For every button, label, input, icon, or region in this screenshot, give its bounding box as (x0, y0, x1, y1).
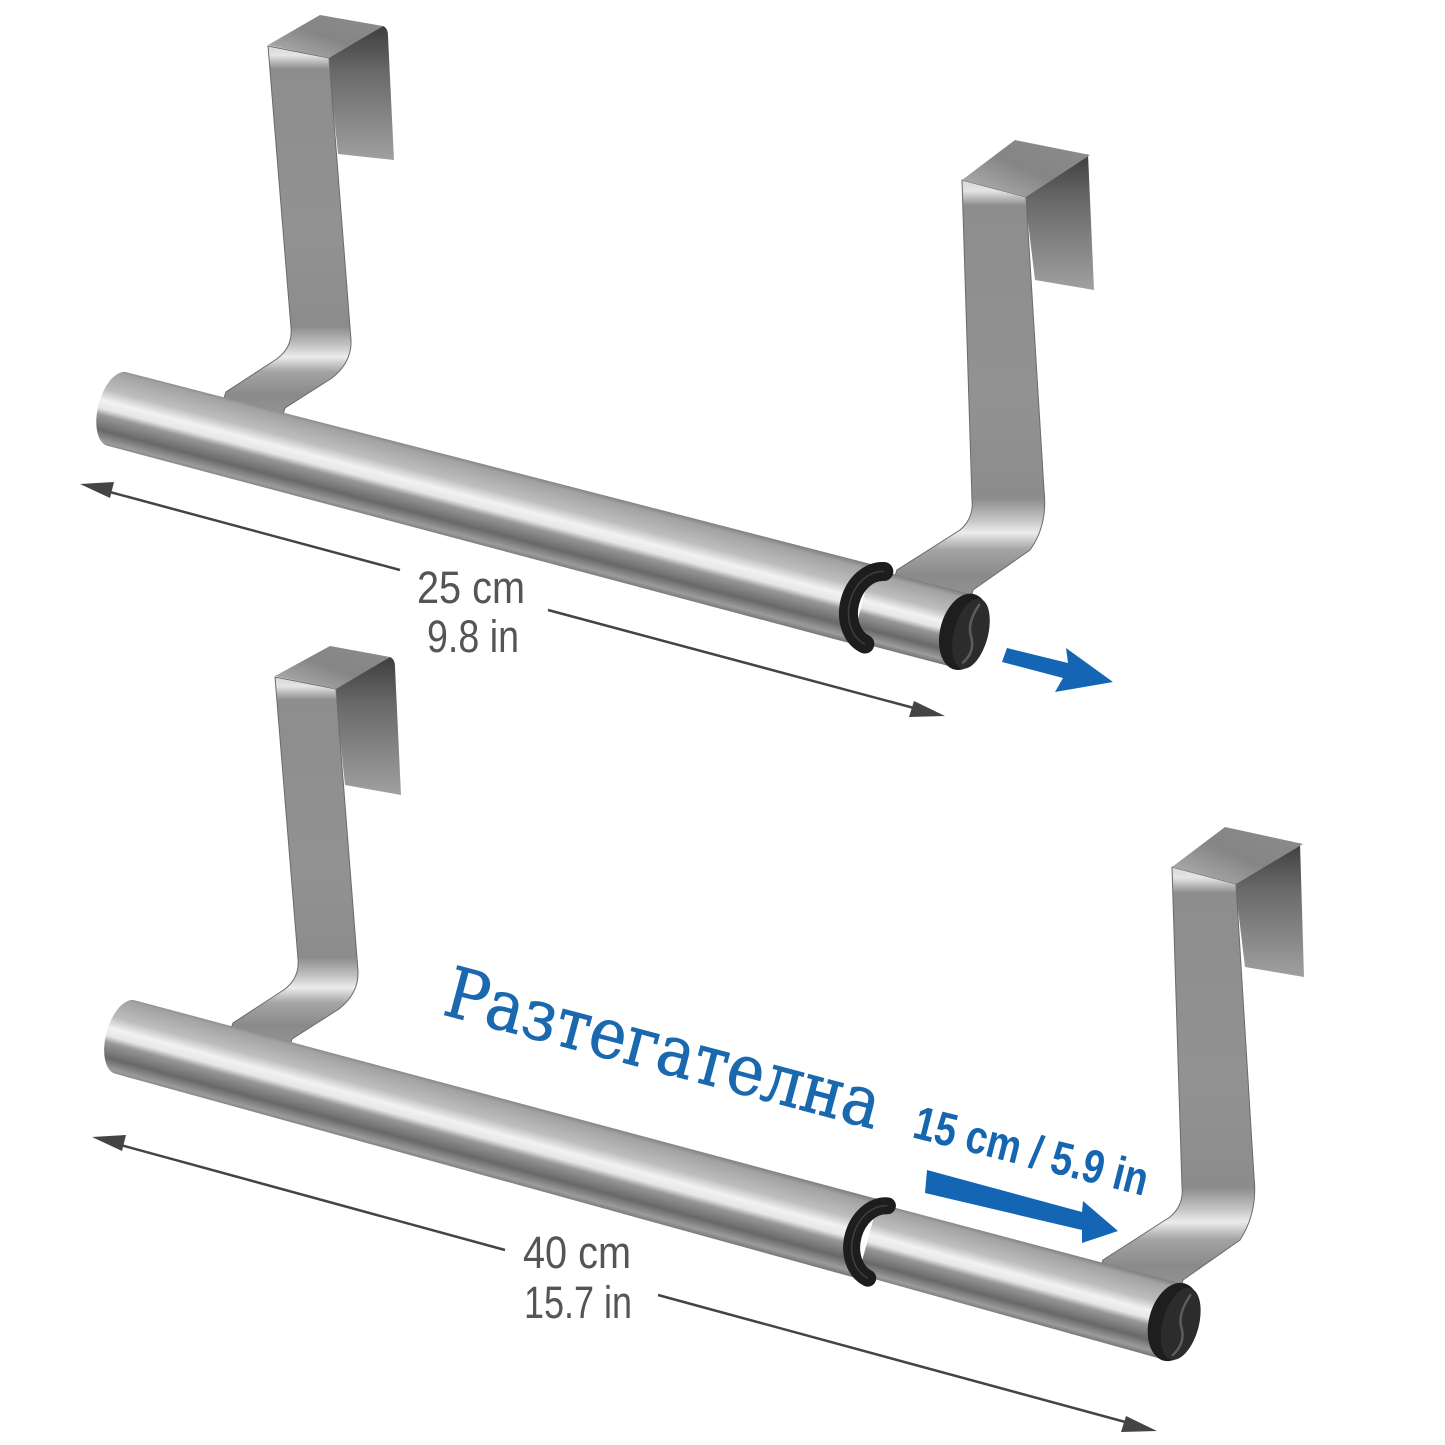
lower dimension label: 15.7 in (524, 1277, 632, 1328)
lower dimension label (523, 1227, 632, 1328)
inner sliding tube (852, 568, 972, 667)
rubber ring (843, 1199, 887, 1278)
upper bar: left bracket (220, 15, 394, 425)
blue arrow: upper (1002, 648, 1113, 692)
rubber ring (841, 565, 884, 644)
upper dimension label (417, 562, 525, 662)
upper dimension label: 25 cm (417, 562, 525, 613)
lower bar: right bracket (1096, 827, 1304, 1300)
outer tube (88, 365, 887, 647)
lower dimension line (92, 1135, 1157, 1432)
inner sliding tube (858, 1201, 1182, 1359)
upper bar: telescopic rod (88, 365, 998, 677)
heading: extendable: Разтегателна (437, 951, 891, 1146)
outer tube (96, 992, 890, 1282)
upper dimension line (80, 482, 945, 717)
extension amount label: 15 cm / 5.9 in (909, 1095, 1154, 1206)
lower dimension label: 40 cm (523, 1227, 631, 1278)
upper dimension label: 9.8 in (427, 611, 519, 662)
rod end cap (931, 588, 997, 676)
rod end cap (1139, 1277, 1209, 1367)
lower bar: left bracket (227, 646, 401, 1056)
lower bar: telescopic rod (96, 992, 1209, 1368)
upper bar: right bracket (890, 140, 1094, 610)
blue arrow: lower (925, 1170, 1118, 1243)
